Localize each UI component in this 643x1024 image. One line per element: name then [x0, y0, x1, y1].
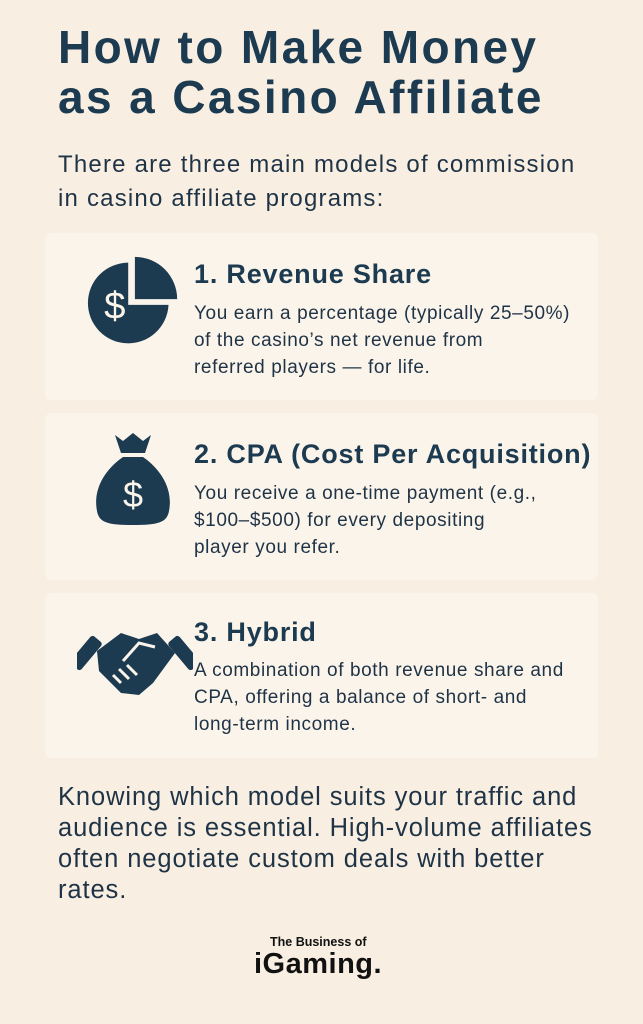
- closing text: Knowing which model suits your traffic and: [58, 783, 577, 811]
- text: of the casino’s net revenue from: [194, 330, 483, 351]
- logo: iGaming.: [254, 948, 382, 980]
- title: as a Casino Affiliate: [58, 71, 544, 123]
- subtitle: in casino affiliate programs:: [58, 185, 385, 212]
- text: [194, 303, 570, 378]
- text: You receive a one-time payment (e.g.,: [194, 483, 537, 504]
- panel: CPA: [45, 413, 598, 580]
- text: referred players — for life.: [194, 357, 430, 378]
- title: How to Make Money: [58, 21, 538, 73]
- heading: 2. CPA (Cost Per Acquisition): [194, 439, 591, 469]
- icon: money bag: $: [123, 474, 143, 515]
- panel: hybrid: [45, 593, 598, 758]
- text: A combination of both revenue share and: [194, 660, 564, 681]
- closing text: rates.: [58, 876, 127, 904]
- text: long-term income.: [194, 714, 356, 735]
- text: player you refer.: [194, 537, 340, 558]
- text: You earn a percentage (typically 25–50%): [194, 303, 570, 324]
- closing text: often negotiate custom deals with better: [58, 845, 545, 873]
- heading: 3. Hybrid: [194, 617, 317, 647]
- heading: 1. Revenue Share: [194, 259, 432, 289]
- text: CPA, offering a balance of short- and: [194, 687, 527, 708]
- logo: The Business of: [270, 935, 367, 949]
- icon: pie chart dollar: $: [104, 284, 125, 327]
- title: [58, 21, 544, 123]
- subtitle: [58, 151, 575, 212]
- icon: pie chart dollar: [88, 256, 178, 344]
- text: [194, 660, 564, 735]
- closing text: audience is essential. High-volume affiliates: [58, 814, 593, 842]
- closing text: [58, 783, 593, 904]
- icon: money bag: [96, 433, 170, 525]
- panel: revenue share: [45, 233, 598, 400]
- icon: handshake: [77, 633, 193, 695]
- subtitle: There are three main models of commission: [58, 151, 575, 178]
- text: $100–$500) for every depositing: [194, 510, 485, 531]
- text: [194, 483, 537, 558]
